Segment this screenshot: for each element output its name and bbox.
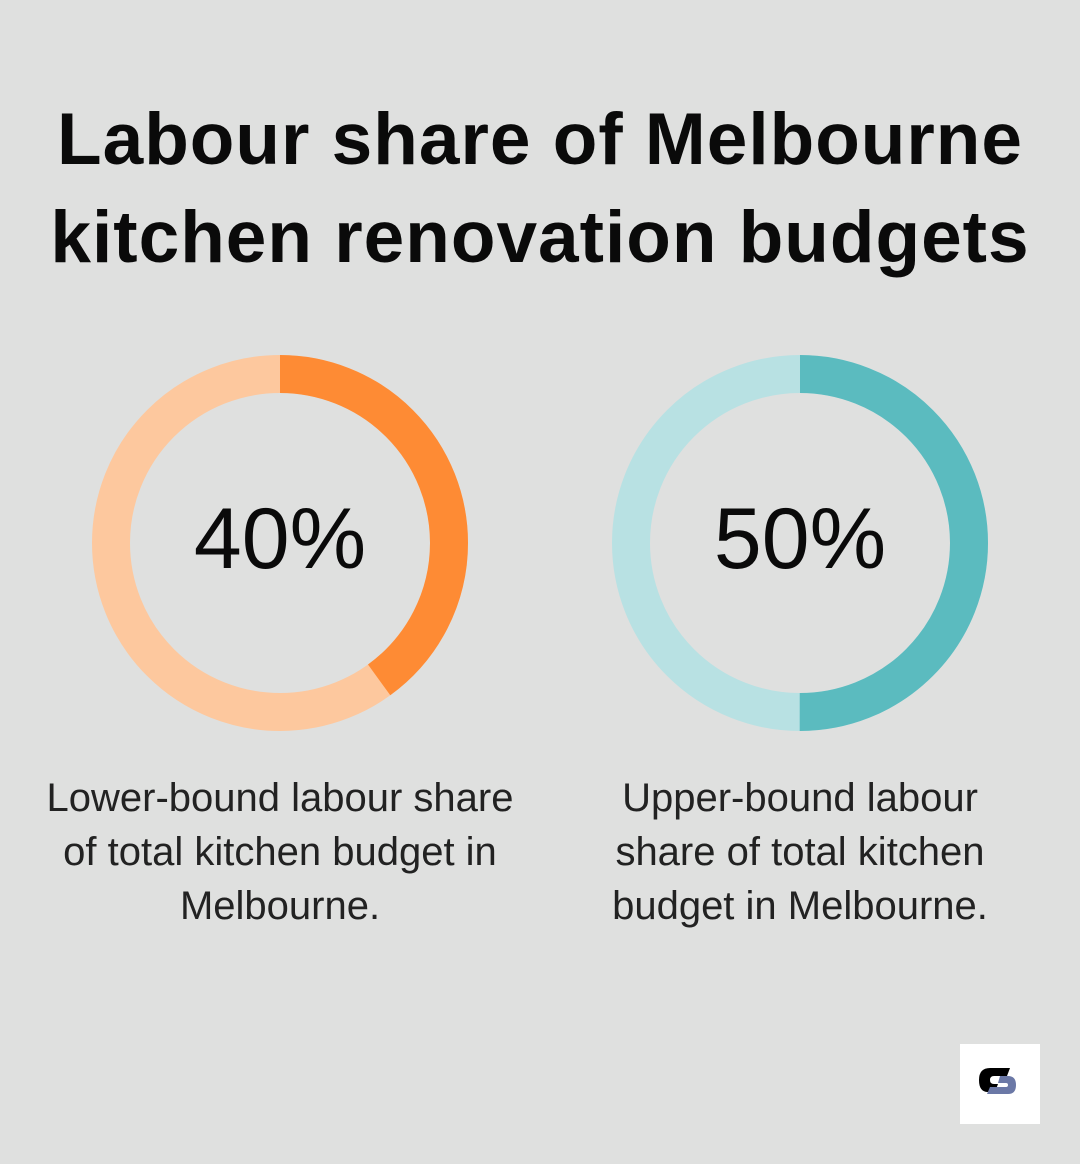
caption left: Lower-bound labour share [46,776,513,820]
caption left: of total kitchen budget in [63,830,497,874]
caption left [46,776,513,928]
donut right [631,374,969,712]
caption right [612,776,988,928]
number 50%: 50% [714,491,886,587]
logo [960,1044,1040,1124]
number 40%: 40% [194,491,366,587]
caption right: share of total kitchen [615,830,985,874]
caption right: Upper-bound labour [622,776,978,820]
title: Labour share of Melbourne [57,99,1023,180]
title [50,99,1030,278]
caption left: Melbourne. [180,884,380,928]
caption right: budget in Melbourne. [612,884,988,928]
title: kitchen renovation budgets [50,197,1030,278]
donut left [111,374,449,712]
